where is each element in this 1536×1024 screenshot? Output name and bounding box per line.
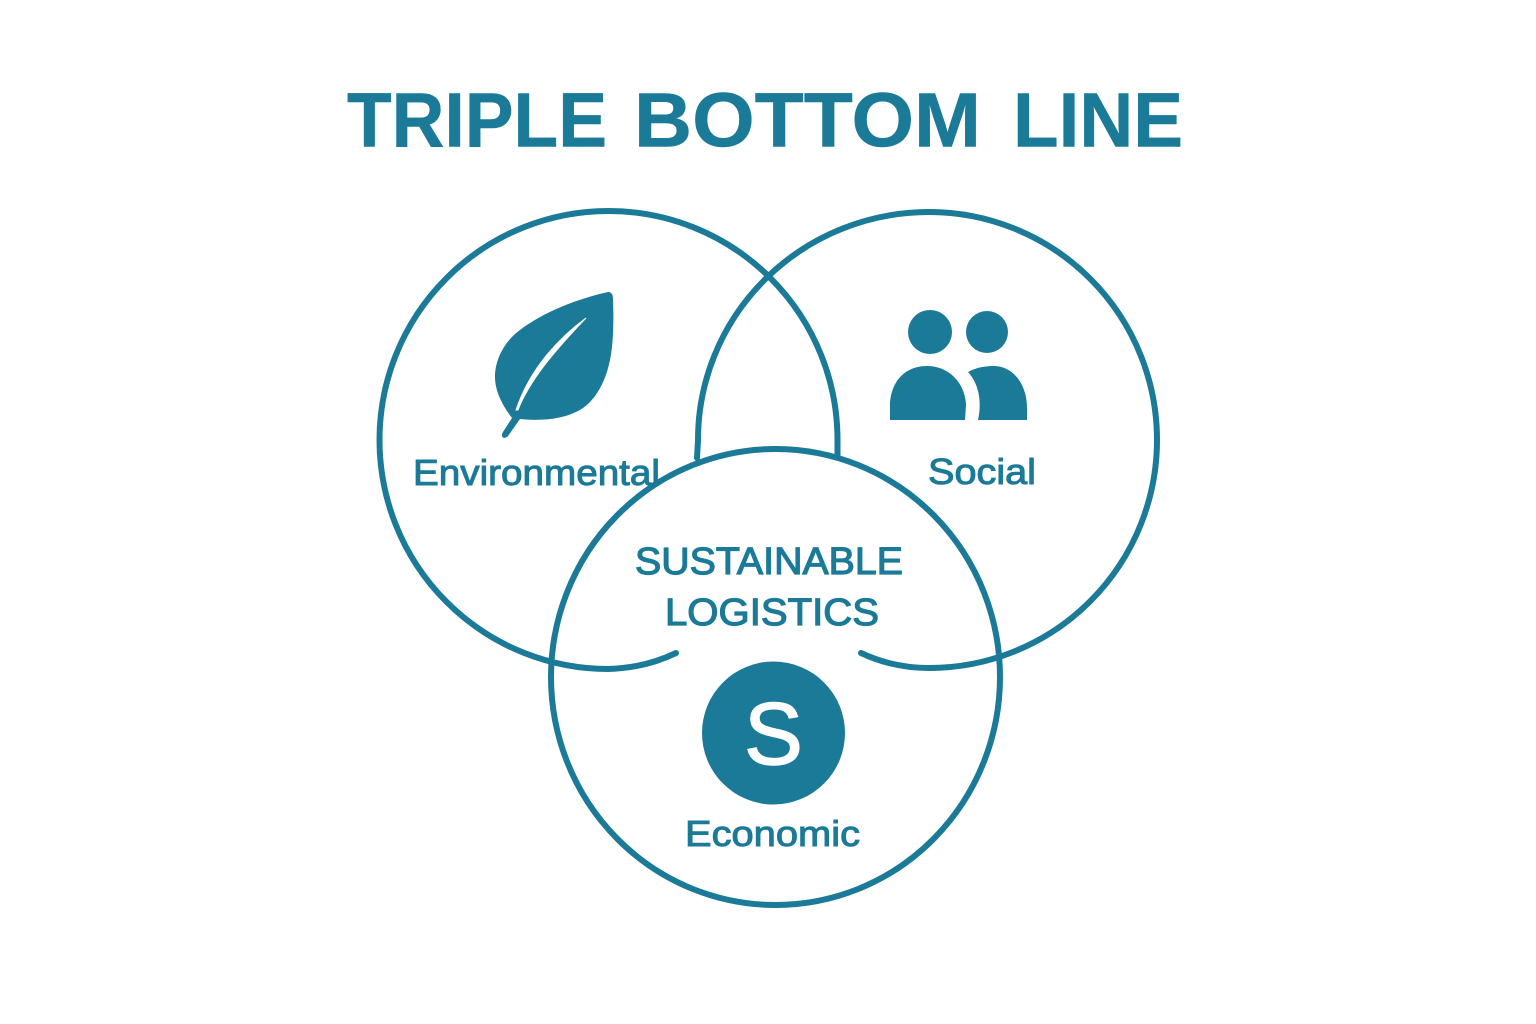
label: environmental: Environmental <box>413 452 660 493</box>
circle: social <box>697 212 1157 668</box>
icon: economic coin <box>702 662 845 804</box>
title <box>347 78 1183 164</box>
icon: people <box>890 310 1027 420</box>
center label: sustainable logistics: LOGISTICS <box>665 592 879 634</box>
title: BOTTOM <box>634 78 981 164</box>
icon: leaf <box>495 292 613 438</box>
label: economic: Economic <box>685 813 860 854</box>
center label: sustainable logistics: SUSTAINABLE <box>635 541 903 583</box>
title: TRIPLE <box>347 78 607 164</box>
circle: economic <box>551 449 1000 905</box>
icon: economic coin: S <box>744 684 803 783</box>
label: social: Social <box>928 451 1036 492</box>
center label: sustainable logistics <box>635 541 903 634</box>
title: LINE <box>1013 78 1183 164</box>
circle: environmental <box>380 211 838 669</box>
